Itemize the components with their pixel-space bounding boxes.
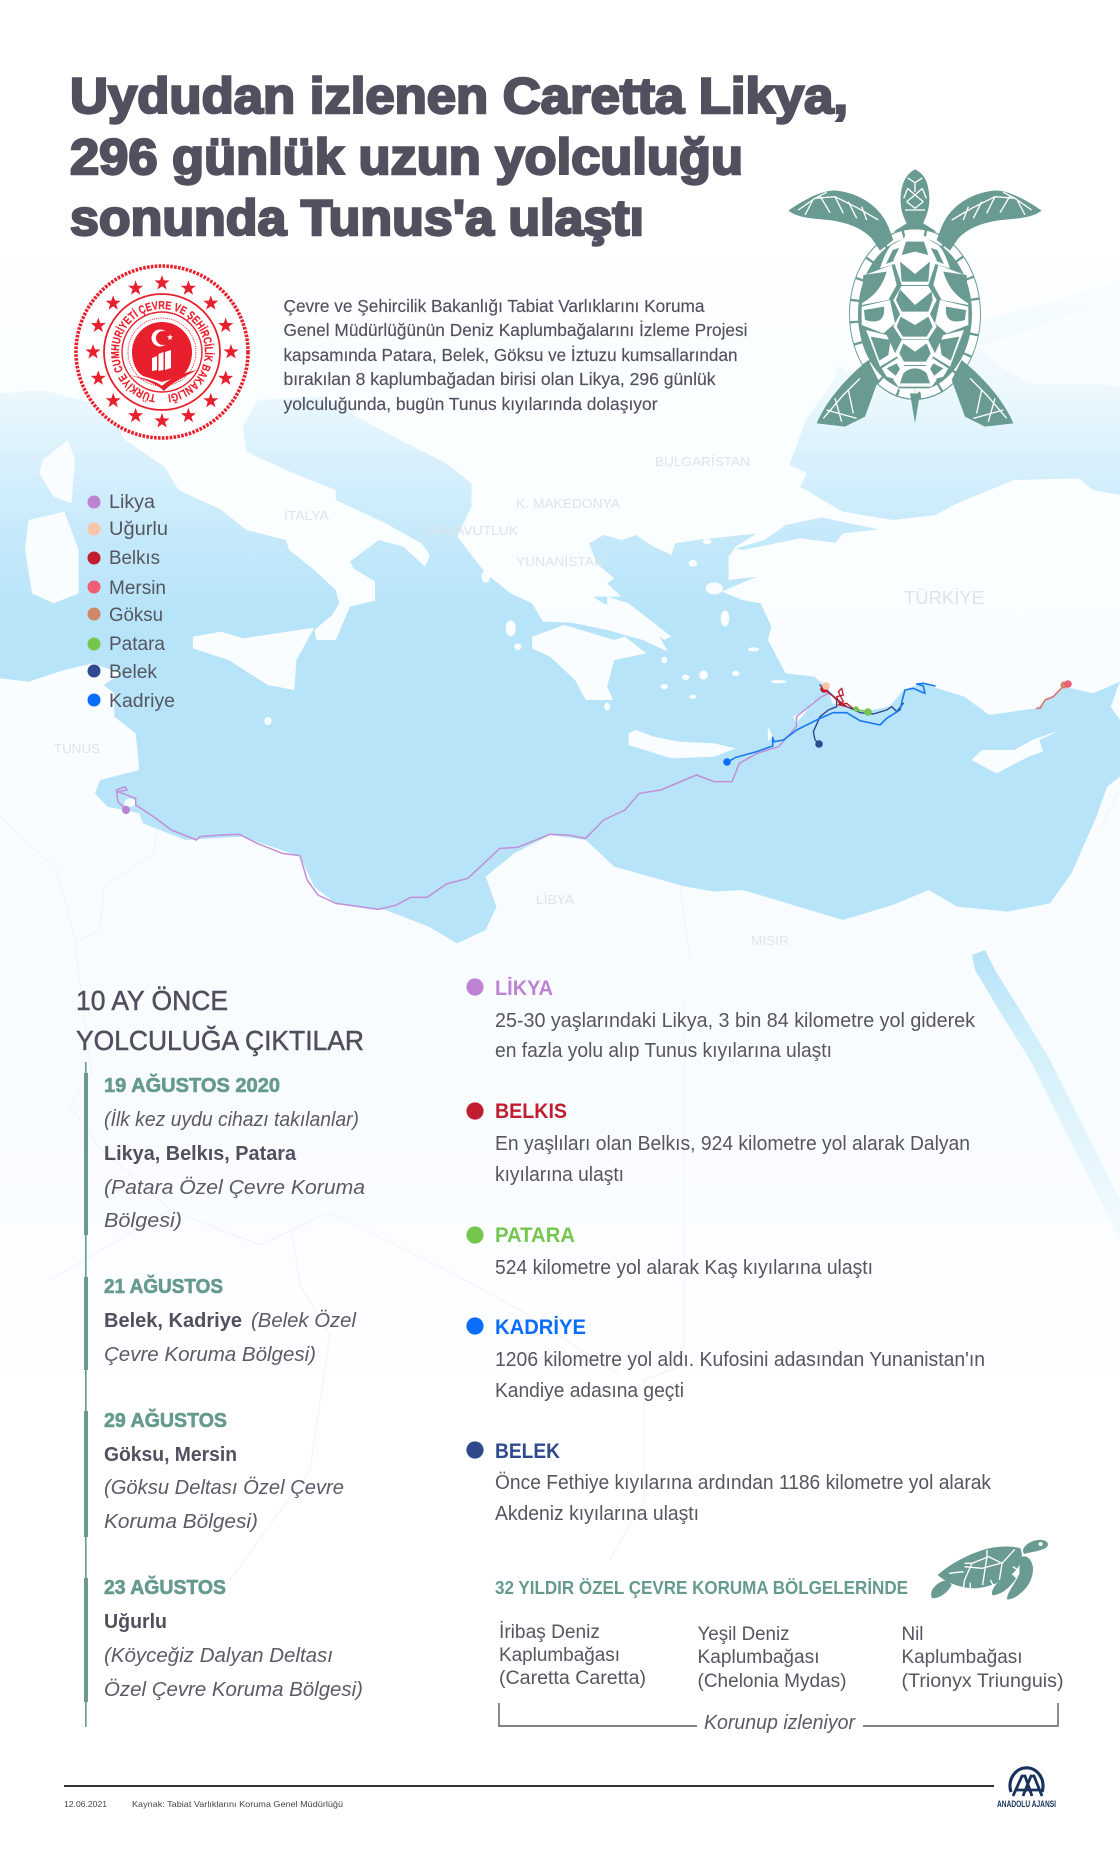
species: Nil Kaplumbağası [902,1624,1064,1692]
species: İribaş Deniz Kaplumbağası: İribaş Deniz [499,1622,600,1643]
legend [88,492,175,712]
intro text: Çevre ve Şehircilik Bakanlığı Tabiat Varlıklarını Koruma [284,296,705,316]
vertebral scutes [893,236,937,285]
timeline entry: 19 Ağustos 2020: 19 AĞUSTOS 2020 [104,1073,280,1097]
timeline entry: 23 Ağustos: Uğurlu [104,1611,167,1633]
track: Patara [855,709,868,712]
intro text [284,296,748,414]
timeline entry: 21 Ağustos: 21 AĞUSTOS [104,1274,223,1298]
turtle detail: Likya [466,977,976,1062]
turtle detail: Likya: en fazla yolu alıp Tunus kıyılarına ulaştı [495,1040,832,1062]
timeline entry: 23 Ağustos [104,1575,363,1701]
species: Nil Kaplumbağası: (Trionyx Triunguis) [902,1671,1064,1692]
track: Mersin and Göksu [1037,683,1068,708]
timeline entry: 19 Ağustos 2020 [104,1073,365,1232]
species: Nil Kaplumbağası: Nil [902,1624,924,1645]
timeline entry: 29 Ağustos: 29 AĞUSTOS [104,1408,227,1432]
timeline entry: 29 Ağustos: Göksu, Mersin [104,1444,237,1466]
turtle detail: Kadriye: KADRİYE [495,1316,586,1339]
timeline entry: 29 Ağustos: Koruma Bölgesi) [104,1511,258,1533]
timeline entry: 19 Ağustos 2020: Likya, Belkıs, Patara [104,1143,297,1165]
icon: ministry seal: TÜRKİYE CUMHURİYETİ ÇEVRE VE ŞEHİRCİLİK BAKANLIĞI [110,301,215,404]
icon: side view sea turtle [931,1540,1048,1599]
turtle detail: Belek: BELEK [495,1440,560,1463]
turtle detail: Patara [466,1224,873,1279]
map country labels: YUNANİSTAN [516,554,604,569]
map country labels: TUNUS [54,741,100,756]
timeline entry: 29 Ağustos: (Göksu Deltası Özel Çevre [104,1477,344,1499]
timeline [84,1062,365,1727]
legend item: Likya: Likya [109,492,155,513]
intro text: bırakılan 8 kaplumbağadan birisi olan Likya, 296 günlük [284,369,716,389]
timeline heading: YOLCULUĞA ÇIKTILAR [76,1025,364,1056]
turtle detail: Belek: Önce Fethiye kıyılarına ardından 1186 kilometre yol alarak [495,1472,992,1494]
legend item: Uğurlu: Uğurlu [109,519,168,540]
scutes [862,265,897,305]
species: İribaş Deniz Kaplumbağası: (Caretta Caretta) [499,1668,646,1689]
timeline entry: 23 Ağustos: (Köyceğiz Dalyan Deltası [104,1645,333,1667]
species: Yeşil Deniz Kaplumbağası: (Chelonia Mydas) [698,1671,846,1692]
legend item: Kadriye: Kadriye [109,691,175,712]
turtle detail: Belek [466,1440,992,1525]
timeline heading: 10 AY ÖNCE [76,985,228,1016]
species: Yeşil Deniz Kaplumbağası: Kaplumbağası [698,1647,820,1668]
map country labels: MISIR [751,933,789,948]
icon: ministry seal [74,264,250,440]
timeline entry: 21 Ağustos: Çevre Koruma Bölgesi) [104,1344,316,1366]
footer rule [64,1785,994,1787]
legend item: Patara: Patara [109,634,165,655]
footer date and source: Kaynak: Tabiat Varlıklarını Koruma Genel Müdürlüğü [132,1799,343,1809]
legend item: Uğurlu [88,519,168,540]
turtle detail: Belkıs: En yaşlıları olan Belkıs, 924 kilometre yol alarak Dalyan [495,1133,970,1155]
timeline entry: 29 Ağustos [104,1408,344,1533]
map country labels: TÜRKİYE [904,588,984,608]
timeline entry: 19 Ağustos 2020: Bölgesi) [104,1210,182,1232]
timeline entry: 21 Ağustos: Belek, Kadriye [104,1310,242,1332]
map country labels [54,454,984,948]
species: Yeşil Deniz Kaplumbağası: Yeşil Deniz [698,1624,790,1645]
title: sonunda Tunus'a ulaştı [70,190,644,246]
satellite tracks and end points [116,680,1072,909]
turtle detail: Belkıs: kıyılarına ulaştı [495,1164,624,1186]
legend item: Göksu: Göksu [109,605,163,626]
track: Belek [813,685,903,744]
turtle detail: Likya: 25-30 yaşlarındaki Likya, 3 bin 84 kilometre yol giderek [495,1010,976,1032]
title [70,68,848,246]
turtle detail: Patara: 524 kilometre yol alarak Kaş kıyılarına ulaştı [495,1257,873,1279]
legend item: Belek: Belek [109,662,158,683]
turtle detail: Kadriye: 1206 kilometre yol aldı. Kufosini adasından Yunanistan'ın [495,1349,985,1371]
footer date and source: 12.06.2021 [64,1799,107,1809]
map country labels: ARNAVUTLUK [426,523,518,538]
timeline heading [76,985,364,1056]
turtle detail: Belkıs: BELKIS [495,1100,567,1123]
legend item: Belek [88,662,158,683]
timeline entry: 23 Ağustos: Özel Çevre Koruma Bölgesi) [104,1679,363,1701]
timeline entry: 21 Ağustos: (Belek Özel [251,1310,357,1332]
legend item: Belkıs: Belkıs [109,548,160,569]
timeline entry: 19 Ağustos 2020: (Patara Özel Çevre Koruma [104,1177,365,1199]
turtle detail: Belkıs [466,1100,970,1186]
species: Yeşil Deniz Kaplumbağası [698,1624,846,1692]
species: Nil Kaplumbağası: Kaplumbağası [902,1647,1022,1668]
logo: Anadolu Ajansı: ANADOLU AJANSI [997,1799,1056,1809]
map country labels: LİBYA [536,892,574,907]
icon: top view sea turtle [788,169,1042,427]
track: Likya [116,693,829,909]
title: Uydudan izlenen Caretta Likya, [70,68,848,124]
timeline entry: 19 Ağustos 2020: (İlk kez uydu cihazı takılanlar) [104,1109,359,1131]
turtle detail: Kadriye [466,1316,985,1402]
species: İribaş Deniz Kaplumbağası [499,1622,646,1689]
map country labels: K. MAKEDONYA [516,496,620,511]
legend item: Likya [88,492,155,513]
turtle detail: Belek: Akdeniz kıyılarına ulaştı [495,1503,699,1525]
track: Belkıs [824,688,855,710]
timeline entry: 21 Ağustos [104,1274,357,1366]
turtle detail: Likya: LİKYA [495,977,553,1000]
map country labels: BULGARİSTAN [655,454,750,469]
species: İribaş Deniz Kaplumbağası: Kaplumbağası [499,1645,620,1666]
heading: protected zones: 32 YILDIR ÖZEL ÇEVRE KORUMA BÖLGELERİNDE [495,1578,908,1598]
intro text: yolculuğunda, bugün Tunus kıyılarında dolaşıyor [284,394,658,414]
legend item: Belkıs [88,548,160,569]
legend item: Mersin: Mersin [109,578,166,599]
map: Mediterranean background [0,200,1120,1580]
upper flipper [788,191,893,251]
track: Kadriye [727,683,935,762]
lower flipper [817,360,878,427]
timeline entry: 23 Ağustos: 23 AĞUSTOS [104,1575,226,1599]
title: 296 günlük uzun yolculuğu [70,129,743,185]
intro text: kapsamında Patara, Belek, Göksu ve İztuzu kumsallarından [284,345,738,365]
bracket: Korunup izleniyor: Korunup izleniyor [704,1712,856,1734]
logo: Anadolu Ajansı [997,1768,1056,1809]
turtle detail: Kadriye: Kandiye adasına geçti [495,1380,684,1402]
intro text: Genel Müdürlüğünün Deniz Kaplumbağalarını İzleme Projesi [284,320,748,340]
bracket: Korunup izleniyor [499,1703,1058,1734]
map country labels: İTALYA [284,508,329,523]
turtle detail: Patara: PATARA [495,1224,575,1247]
